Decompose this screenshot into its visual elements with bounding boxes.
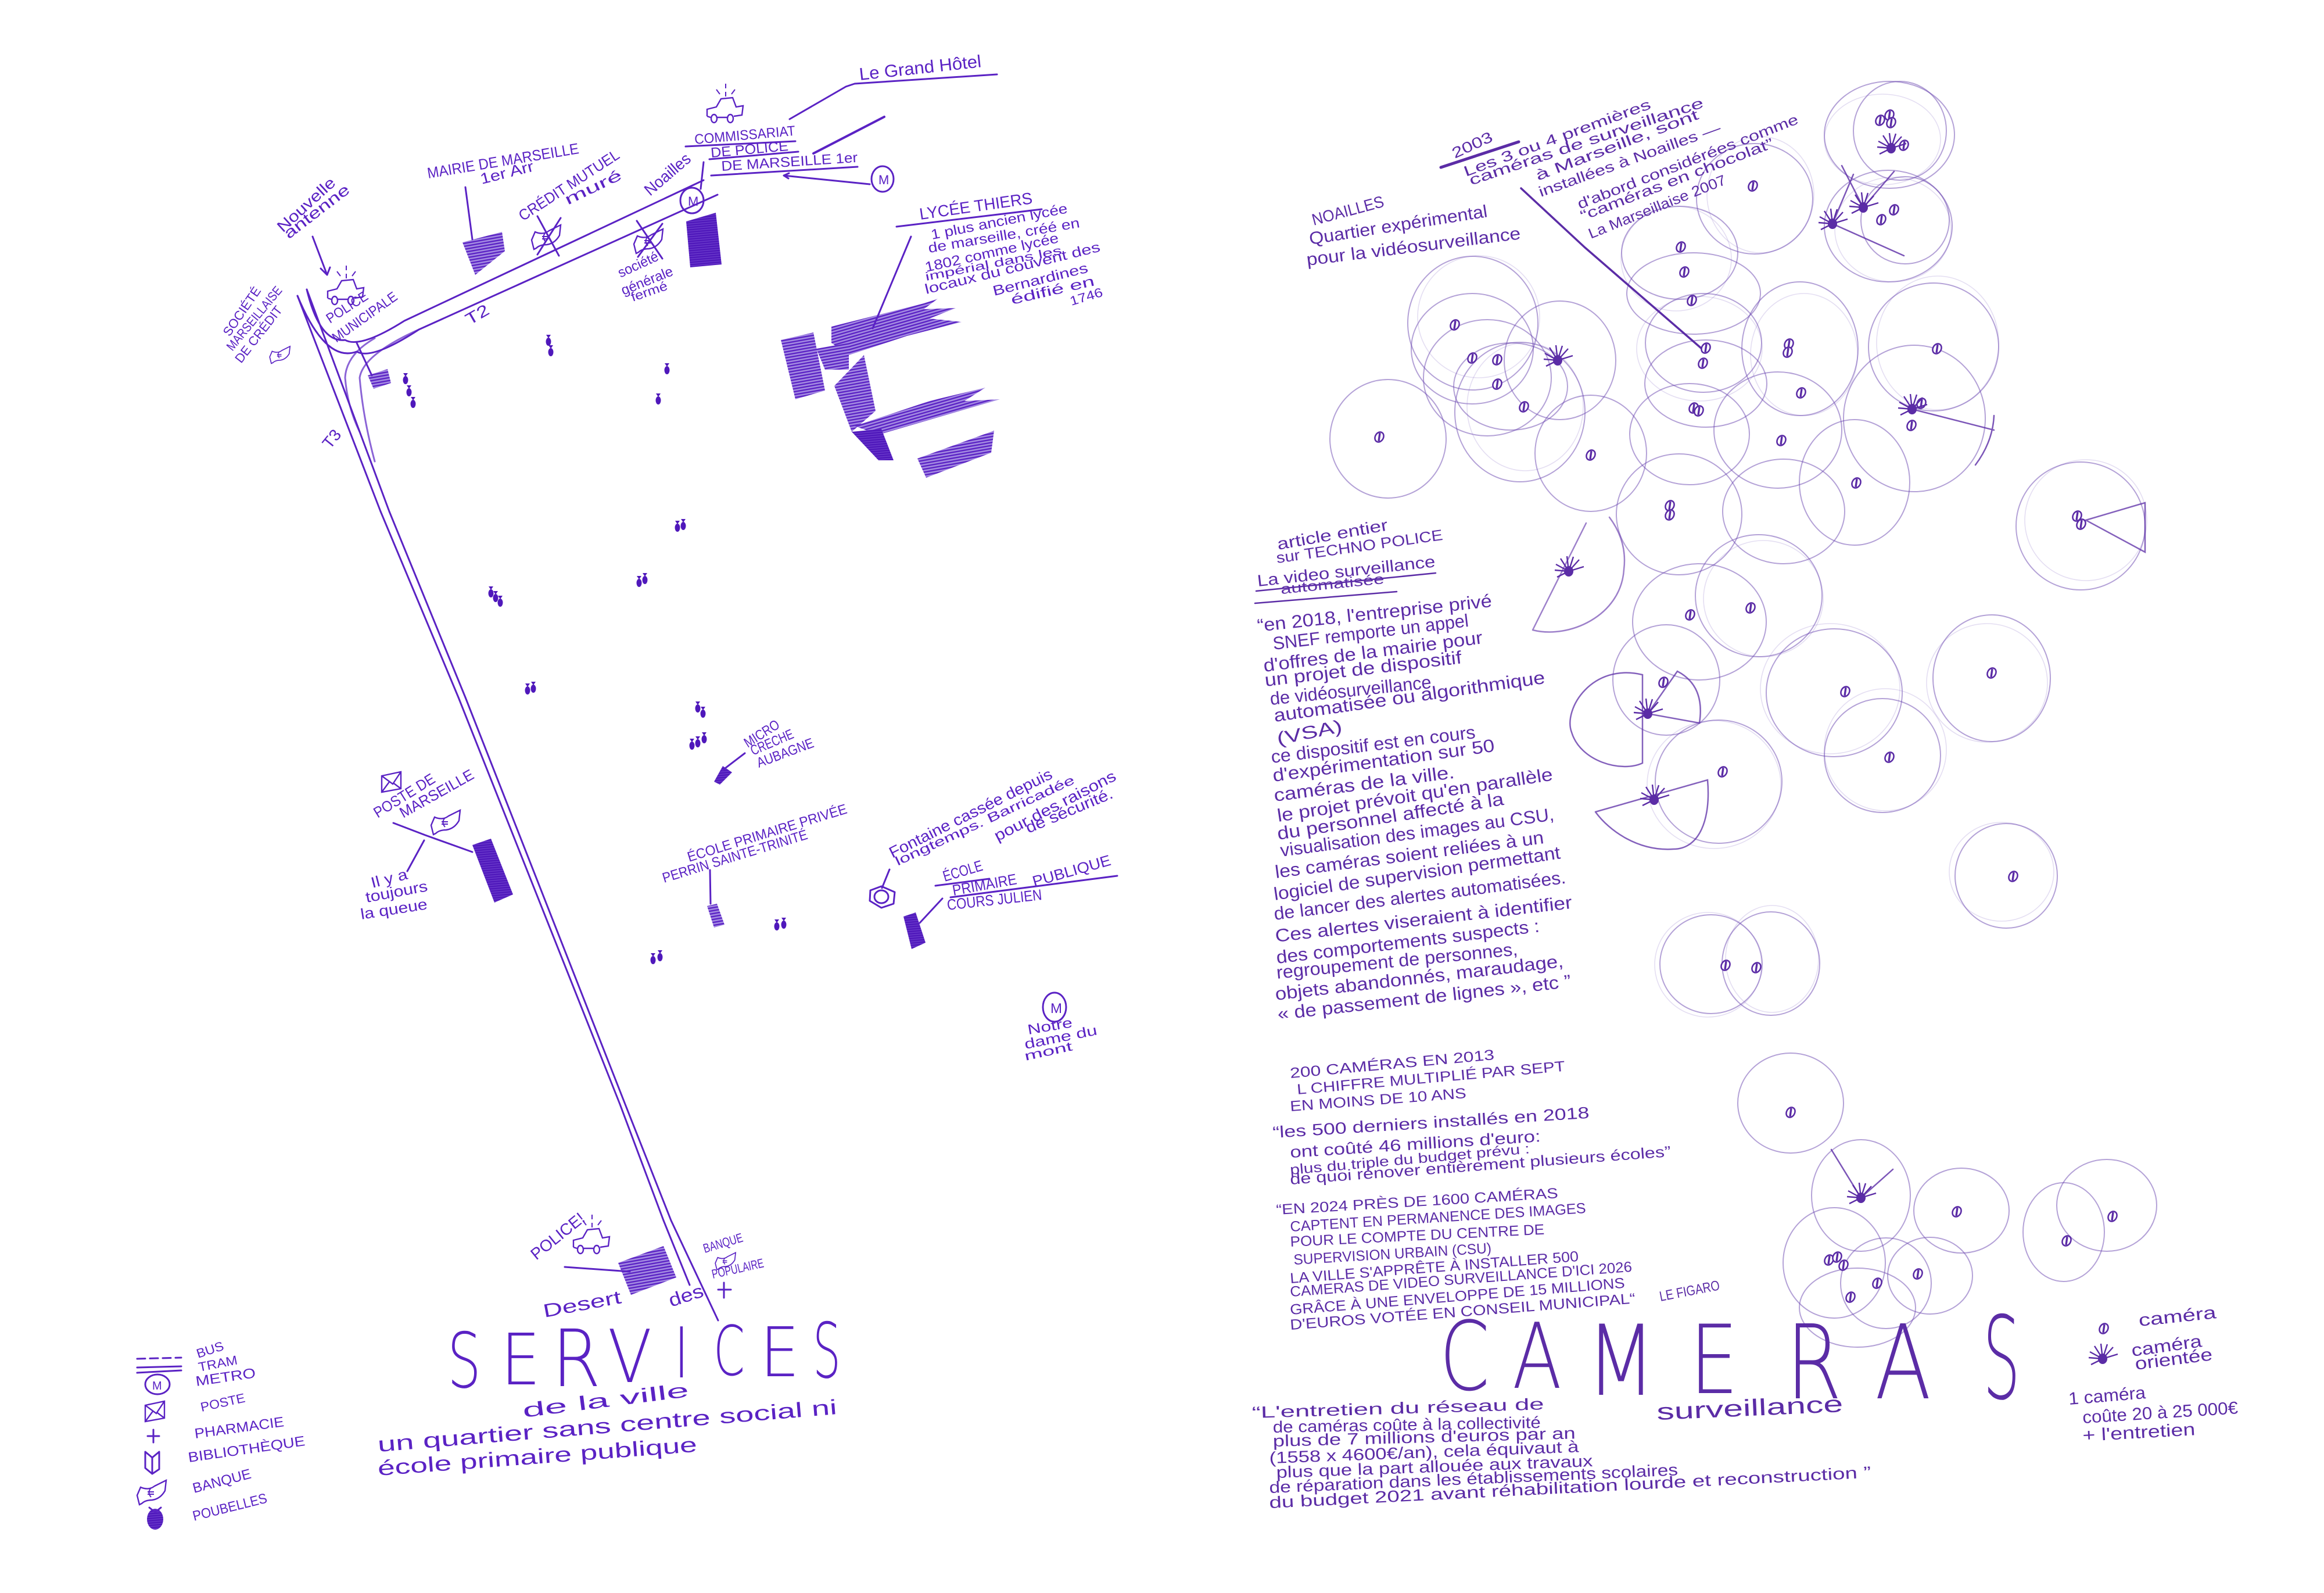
title: cameras: M — [1586, 1304, 1656, 1418]
text: article techno police: sur TECHNO POLICE — [1275, 526, 1444, 567]
map labels: la queue — [359, 895, 429, 923]
text: article techno police: ce dispositif est en cours — [1270, 722, 1476, 767]
text: camera figures: POUR LE COMPTE DU CENTRE DE — [1290, 1222, 1545, 1250]
legend: services: M — [152, 1380, 162, 1392]
legend: cameras: coûte 20 à 25 000€ — [2082, 1398, 2239, 1427]
map labels: Notre — [1026, 1015, 1074, 1038]
map labels: toujours — [364, 877, 429, 906]
map labels: Fontaine cassée depuis — [886, 765, 1055, 861]
text: camera figures: de quoi rénover entièrement plusieurs écoles” — [1289, 1143, 1672, 1188]
text: article techno police: le projet prévoit qu'en parallèle — [1276, 764, 1554, 826]
text: network cost quote: plus de 7 millions d'euros par an — [1272, 1424, 1576, 1450]
title: desert des services: E — [501, 1319, 540, 1401]
text: 2003 note — [1449, 95, 1801, 242]
text: article techno police: automatisée ou algorithmique — [1272, 667, 1546, 726]
map labels: CRECHE — [748, 726, 796, 759]
text: network cost quote: du budget 2021 avant réhabilitation lourde et reconstruction ” — [1269, 1463, 1871, 1512]
text: camera figures: GRÂCE À UNE ENVELOPPE DE 15 MILLIONS — [1289, 1275, 1626, 1318]
text: camera figures: CAPTENT EN PERMANENCE DES IMAGES — [1290, 1200, 1586, 1235]
map labels: MARSEILLAISE — [224, 283, 285, 353]
title: desert des services: I — [674, 1313, 689, 1394]
map labels: mont — [1023, 1039, 1074, 1064]
map labels: T2 — [462, 300, 492, 328]
legend: services: POUBELLES — [191, 1491, 269, 1524]
text: article techno police: des comportements suspects : — [1275, 915, 1541, 968]
map labels: locaux du couvent des — [923, 239, 1102, 298]
map labels: COMMISSARIAT — [694, 123, 796, 148]
text: article techno police: un projet de dispositif — [1264, 647, 1463, 690]
title: cameras: E — [1690, 1305, 1738, 1416]
text: article techno police — [1255, 516, 1573, 1024]
title: cameras: C — [1440, 1301, 1490, 1412]
text: 2003 note: Les 3 ou 4 premières — [1461, 96, 1653, 180]
map labels: COURS JULIEN — [946, 886, 1043, 914]
text: network cost quote: de réparation dans les établissements scolaires — [1269, 1460, 1679, 1497]
text: network cost quote: de caméras coûte à la collectivité — [1273, 1413, 1541, 1436]
text: article techno police: visualisation des images au CSU, — [1279, 804, 1555, 861]
title: desert des services — [447, 1280, 841, 1405]
map labels: longtemps. Barricadée — [893, 772, 1077, 869]
map labels: AUBAGNE — [755, 735, 816, 771]
text: camera figures: SUPERVISION URBAIN (CSU) — [1293, 1240, 1492, 1268]
text: 2003 note: caméras de surveillance — [1467, 95, 1706, 189]
text: article techno police: « de passement de lignes », etc ” — [1276, 971, 1572, 1024]
text: article techno police: de lancer des alertes automatisées. — [1272, 867, 1567, 924]
title: desert des services: S — [447, 1316, 481, 1405]
map labels: PERRIN SAINTE-TRINITÉ — [661, 827, 809, 886]
map labels: POSTE DE — [370, 770, 438, 821]
map labels — [220, 52, 1119, 1281]
bin markers — [403, 335, 787, 964]
map labels: édifié en — [1009, 273, 1096, 308]
map labels: dame du — [1023, 1023, 1099, 1053]
map labels: Le Grand Hôtel — [858, 52, 982, 84]
map labels: Nouvelle — [274, 174, 339, 235]
panel: camera coverage map — [1330, 81, 2157, 1365]
text: article techno police: La video surveillance — [1256, 552, 1436, 590]
text: article techno police: les caméras soient reliées à un — [1274, 827, 1545, 882]
faint second pass of circles — [1418, 94, 2147, 1017]
map icons: M — [1050, 1001, 1062, 1016]
fixed cameras — [1373, 109, 2119, 1335]
legend: services: METRO — [195, 1365, 257, 1390]
map labels: fermé — [629, 278, 669, 305]
text: camera figures: ont coûté 46 millions d'euro: — [1289, 1127, 1541, 1161]
map icons: M — [688, 194, 698, 209]
map labels: 1er Arr — [478, 157, 536, 188]
title: desert des services: des — [666, 1280, 706, 1311]
map labels: PRIMAIRE — [951, 870, 1018, 899]
map labels: POPULAIRE — [711, 1255, 765, 1281]
map labels: muré — [562, 166, 625, 208]
title: desert des services: V — [608, 1314, 652, 1399]
legend: services — [137, 1338, 306, 1530]
title: desert des services: S — [813, 1306, 841, 1395]
title: desert des services: C — [713, 1311, 745, 1391]
text: camera figures — [1272, 1046, 1721, 1333]
map labels: Noailles — [641, 149, 694, 199]
subtitle: services: école primaire publique — [377, 1433, 698, 1480]
map icons: M — [878, 173, 889, 187]
title: cameras: R — [1786, 1303, 1842, 1423]
text: network cost quote: (1558 x 4600€/an), cela équivaut à — [1269, 1437, 1579, 1467]
text: camera figures: EN MOINS DE 10 ANS — [1289, 1085, 1467, 1115]
map labels: société — [615, 249, 661, 281]
legend: cameras: 1 caméra — [2068, 1383, 2146, 1409]
map labels: pour des raisons — [991, 767, 1119, 844]
map labels: de sécurité. — [1023, 785, 1116, 837]
map labels: POLICE — [324, 288, 371, 327]
text: 2003 note: à Marseille, sont — [1533, 107, 1701, 184]
subtitle: services — [376, 1379, 838, 1480]
text: 2003 note: “caméras en chocolat” — [1578, 135, 1776, 224]
text: article techno police: caméras de la ville. — [1272, 762, 1455, 806]
leader lines and arrows — [313, 74, 1117, 1272]
legend: cameras — [2068, 1303, 2239, 1445]
text: article techno police: Ces alertes viseraient à identifier — [1274, 892, 1573, 946]
text: article techno police: automatisée — [1280, 571, 1385, 597]
subtitle: services: de la ville — [521, 1379, 690, 1422]
legend: services: POSTE — [199, 1390, 246, 1415]
subtitle: surveillance: surveillance — [1656, 1391, 1844, 1425]
map labels: PUBLIQUE — [1030, 851, 1113, 890]
map labels: DE MARSEILLE 1er — [721, 150, 858, 174]
text: network cost quote: plus que la part allouée aux travaux — [1276, 1452, 1593, 1481]
text: camera figures: plus du triple du budget prévu : — [1289, 1141, 1530, 1178]
text: Noailles note — [1306, 192, 1522, 270]
first cameras pointer line — [1441, 142, 1702, 349]
map labels: ÉCOLE PRIMAIRE PRIVÉE — [686, 801, 849, 865]
text: camera figures: “les 500 derniers installés en 2018 — [1272, 1104, 1590, 1141]
map labels: MAIRIE DE MARSEILLE — [426, 139, 580, 182]
text: article techno police: article entier — [1276, 516, 1389, 553]
text: article techno police: d'offres de la mairie pour — [1262, 627, 1484, 676]
legend: cameras: caméra — [2137, 1303, 2217, 1330]
map labels: Bernardines — [991, 260, 1089, 299]
text: article techno police: regroupement de personnes, — [1275, 939, 1519, 983]
text: camera figures: 200 CAMÉRAS EN 2013 — [1289, 1046, 1495, 1082]
map labels: MUNICIPALE — [329, 289, 400, 346]
map labels: T3 — [319, 426, 345, 452]
map labels: ÉCOLE — [941, 857, 985, 885]
legend: services: PHARMACIE — [193, 1414, 285, 1442]
legend: services: TRAM — [197, 1352, 239, 1374]
title: cameras: A — [1512, 1304, 1562, 1409]
map labels: impérial dans les — [924, 244, 1063, 284]
map labels: BANQUE — [701, 1230, 745, 1256]
buildings — [368, 213, 1000, 1295]
map labels: LYCÉE THIERS — [918, 189, 1034, 223]
map icons — [270, 84, 1066, 1298]
text: article techno police: d'expérimentation sur 50 — [1271, 735, 1495, 786]
oriented cameras — [1544, 133, 2118, 1365]
map labels: générale — [619, 263, 675, 299]
map labels: CRÉDIT MUTUEL — [515, 146, 622, 224]
text: article techno police: “en 2018, l'entreprise privé — [1256, 590, 1493, 636]
text: camera figures: LE FIGARO — [1658, 1277, 1721, 1305]
camera coverage circles — [1330, 81, 2157, 1347]
title: desert des services: R — [552, 1313, 601, 1405]
map labels: MICRO — [741, 717, 783, 751]
map labels: Il y a — [369, 865, 410, 892]
title: cameras: S — [1983, 1293, 2020, 1426]
title: desert des services: E — [760, 1312, 799, 1392]
text: 2003 note: La Marseillaise 2007 — [1586, 172, 1728, 242]
text: network cost quote: “L'entretien du réseau de — [1251, 1395, 1544, 1422]
map labels: POLICE! — [527, 1209, 588, 1263]
title: desert des services: Desert — [541, 1286, 623, 1322]
panel: services map — [220, 52, 1119, 1320]
text: article techno police: de vidéosurveillance — [1269, 672, 1432, 709]
text: camera figures: L CHIFFRE MULTIPLIÉ PAR SEPT — [1296, 1058, 1566, 1098]
text: Noailles note: Quartier expérimental — [1308, 202, 1489, 249]
text: 2003 note: d'abord considérées comme — [1575, 111, 1801, 213]
map labels: 1746 — [1068, 285, 1104, 309]
text: article techno police: logiciel de supervision permettant — [1272, 842, 1562, 904]
subtitle: services: un quartier sans centre social ni — [376, 1395, 838, 1456]
legend: cameras: caméra — [2130, 1331, 2203, 1361]
text: article techno police: objets abandonnés, maraudage, — [1274, 951, 1564, 1004]
map labels: SOCIÉTÉ — [220, 284, 264, 339]
legend: cameras: + l'entretien — [2082, 1420, 2196, 1445]
map labels: DE POLICE — [710, 138, 789, 161]
legend: cameras: orientée — [2134, 1345, 2214, 1374]
text: 2003 note: installées à Noailles — — [1537, 120, 1723, 201]
text: camera figures: “EN 2024 PRÈS DE 1600 CAMÉRAS — [1276, 1184, 1559, 1218]
legend: services: BUS — [195, 1338, 225, 1361]
map labels: MARSEILLE — [396, 765, 477, 821]
tram and bus lines — [297, 180, 718, 1320]
title: cameras — [1440, 1293, 2020, 1426]
text: camera figures: CAMERAS DE VIDEO SURVEILLANCE D'ICI 2026 — [1289, 1259, 1633, 1300]
text: Noailles note: pour la vidéosurveillance — [1306, 224, 1522, 270]
text: camera figures: LA VILLE S'APPRÊTE À INSTALLER 500 — [1289, 1248, 1579, 1287]
text: network cost quote — [1251, 1395, 1871, 1512]
map labels: DE CRÉDIT — [232, 303, 285, 366]
map labels: antenne — [280, 181, 353, 242]
legend: services: BANQUE — [191, 1466, 253, 1497]
oriented camera wedges — [1533, 166, 2145, 1198]
text: article techno police: du personnel affecté à la — [1276, 789, 1505, 844]
map labels: de marseille, créé en — [927, 215, 1081, 256]
title: cameras: A — [1875, 1303, 1931, 1423]
text: article techno police: SNEF remporte un appel — [1272, 610, 1469, 654]
text: 2003 note: 2003 — [1449, 128, 1495, 162]
legend: services: BIBLIOTHÈQUE — [187, 1433, 306, 1466]
map labels: 1802 comme lycée — [923, 230, 1060, 275]
text: Noailles note: NOAILLES — [1310, 192, 1386, 229]
text: camera figures: D'EUROS VOTÉE EN CONSEIL MUNICIPAL“ — [1289, 1290, 1636, 1333]
text: article techno police: (VSA) — [1275, 716, 1344, 749]
map labels: 1 plus ancien lycée — [930, 201, 1069, 243]
